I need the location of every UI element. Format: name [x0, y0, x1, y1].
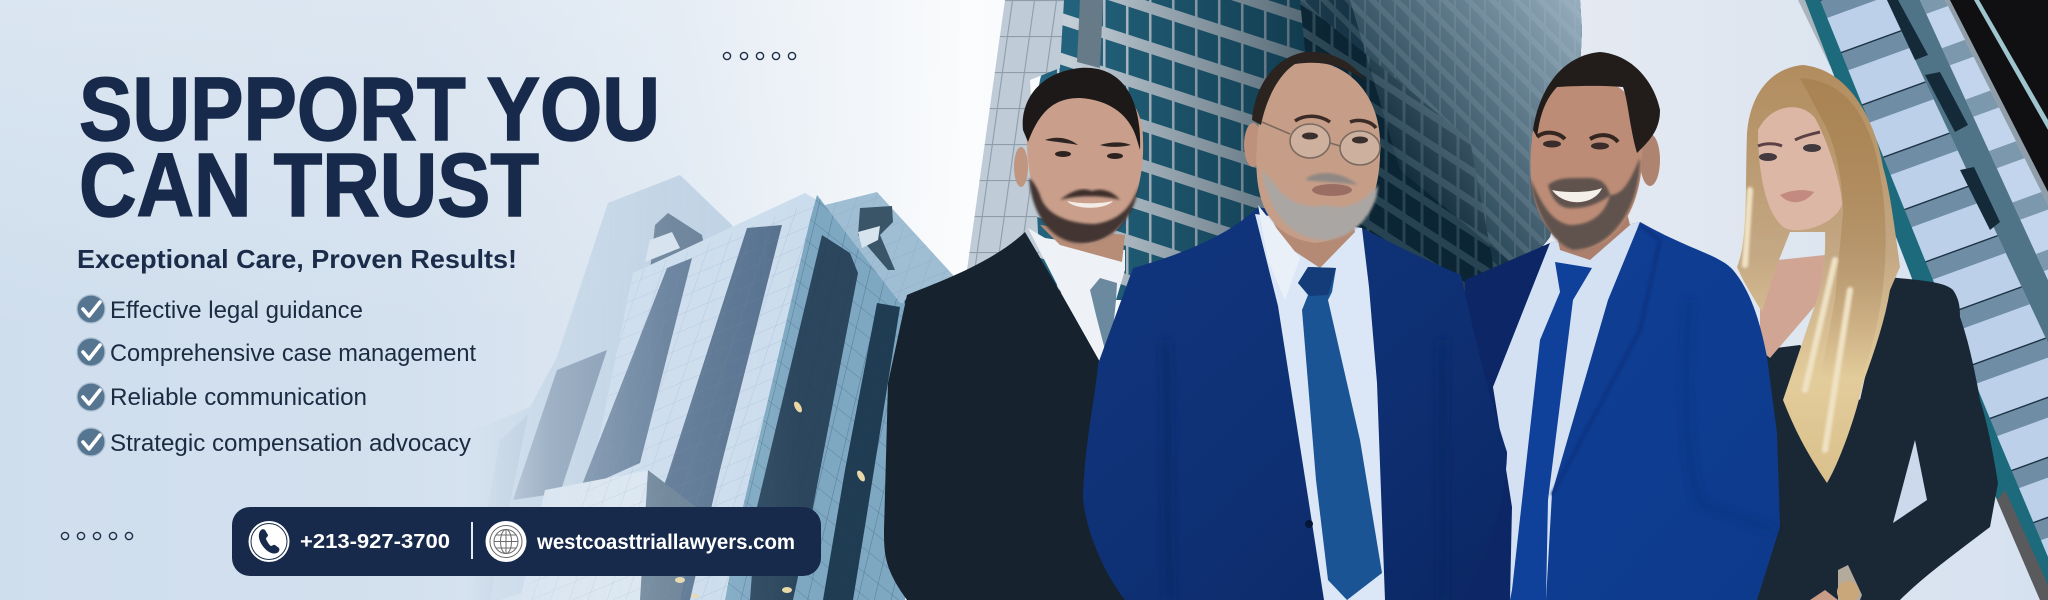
- item: reliable communication: Reliable communication: [110, 384, 367, 411]
- blazer: [1755, 277, 1998, 600]
- shirt: [1255, 214, 1385, 600]
- decorative dots: top: [723, 52, 796, 60]
- decorative dots: bottom: [61, 532, 133, 540]
- main left face: [520, 193, 817, 600]
- watch: [1810, 565, 1862, 600]
- item: comprehensive case management: Comprehensive case management: [110, 340, 476, 367]
- window lights: [675, 400, 867, 598]
- tower glass windows: [1000, 0, 1582, 300]
- title: SUPPORT YOU: [79, 60, 660, 160]
- left building: [440, 175, 953, 600]
- subtitle: Exceptional Care, Proven Results!: [77, 244, 517, 274]
- icon: globe: [486, 521, 526, 562]
- tie: [1298, 267, 1382, 600]
- back tower: [490, 175, 772, 598]
- jacket: [1460, 222, 1780, 600]
- main right face: [725, 195, 906, 600]
- lapel shadow: [1552, 225, 1660, 495]
- icon: phone: [248, 521, 290, 562]
- concrete tile column: [967, 0, 1064, 270]
- person: man in black suit: [884, 68, 1143, 600]
- glasses: [1262, 122, 1380, 165]
- hair shading: [1800, 78, 1886, 380]
- neck: [1040, 225, 1125, 262]
- central tower: [967, 0, 1582, 300]
- phone number: +213-927-3700: [300, 531, 450, 553]
- grey column: [1077, 0, 1103, 68]
- face: [1758, 107, 1842, 230]
- person: man in navy suit with glasses: [1083, 52, 1507, 600]
- tie: [1510, 262, 1592, 600]
- website: westcoasttriallawyers.com: [536, 531, 795, 554]
- head: [1014, 68, 1143, 245]
- title: [79, 60, 660, 236]
- second tower: [825, 192, 953, 304]
- dark jacket side: [1460, 243, 1550, 600]
- title: CAN TRUST: [79, 136, 539, 236]
- neck: [1555, 205, 1630, 260]
- head: [1244, 52, 1380, 243]
- tie: [1090, 278, 1117, 350]
- checklist: [77, 295, 476, 457]
- jacket: [884, 232, 1140, 600]
- chest: [1760, 255, 1825, 358]
- divider: [471, 522, 473, 559]
- sleeve shadows: [1165, 340, 1443, 600]
- item: effective legal guidance: Effective legal guidance: [110, 297, 363, 324]
- shirt: [1028, 228, 1125, 362]
- arm gap: [1893, 440, 1927, 523]
- contact bar: [232, 507, 821, 576]
- right tower: [1798, 0, 2048, 600]
- hair: [1737, 65, 1900, 483]
- jacket button: [1305, 520, 1313, 528]
- neck: [1262, 200, 1355, 268]
- shirt: [1493, 222, 1640, 600]
- collar: [1258, 205, 1300, 300]
- item: strategic compensation advocacy: Strategic compensation advocacy: [110, 430, 471, 457]
- tie knot: [1298, 267, 1336, 296]
- jacket: [1083, 207, 1507, 600]
- hair highlights: [1745, 190, 1850, 450]
- sleeve seam: [1686, 300, 1775, 530]
- person: woman: [1737, 65, 1998, 600]
- person: man in royal blue suit: [1460, 52, 1780, 600]
- head: [1530, 52, 1660, 250]
